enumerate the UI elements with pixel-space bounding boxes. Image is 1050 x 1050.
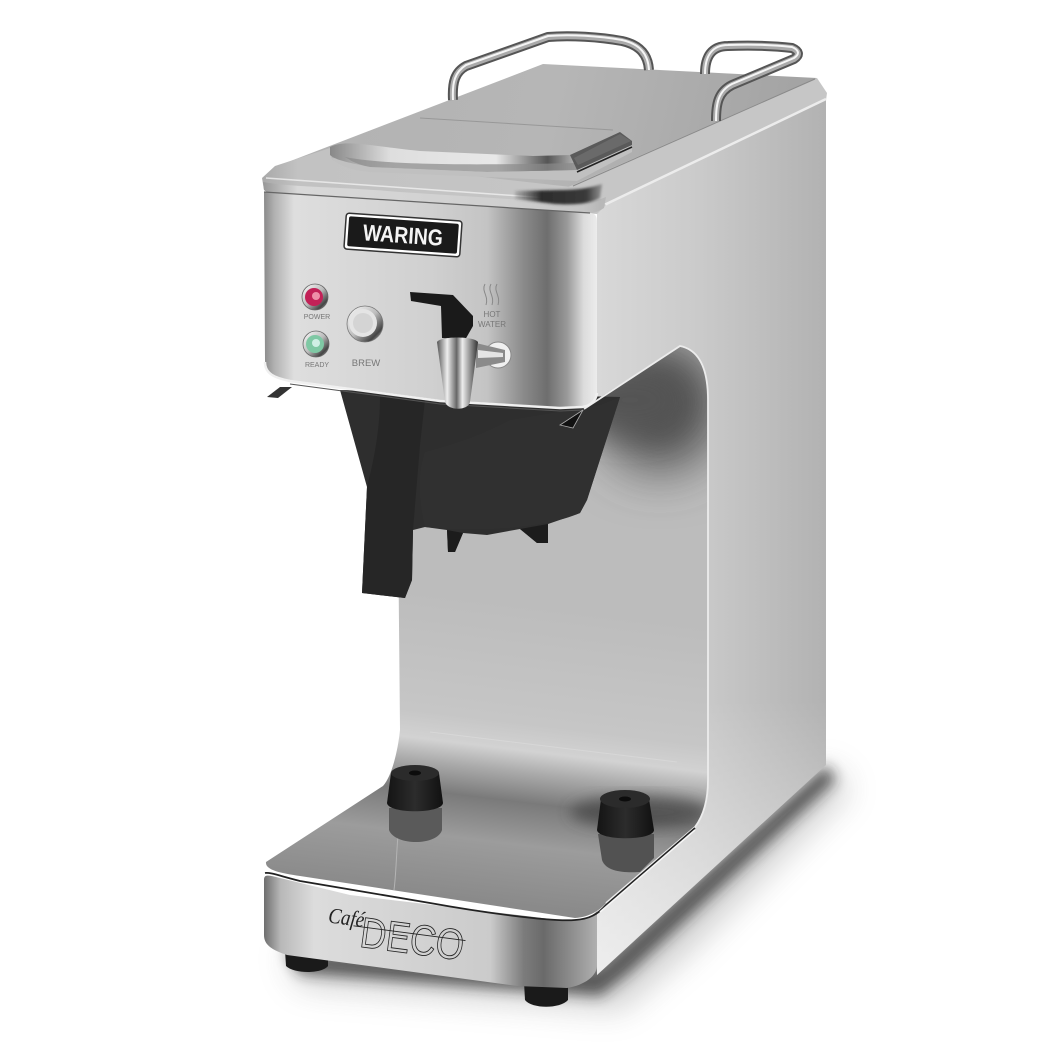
ready indicator <box>303 331 329 369</box>
lid <box>330 118 632 181</box>
body side panel <box>597 100 826 975</box>
interior back wall and drip tray plate <box>260 340 720 930</box>
icon and label: hot water <box>478 284 506 329</box>
logo: Café DECO: Café <box>327 903 367 932</box>
left bumper <box>387 765 443 842</box>
icon and label: hot water: HOT <box>484 310 501 319</box>
product illustration: coffee brewer <box>262 31 854 1022</box>
black funnel / brew basket <box>340 390 620 598</box>
rear carry handle <box>453 35 649 100</box>
ready indicator: READY <box>305 362 329 369</box>
power indicator <box>302 284 330 321</box>
floor shadow <box>285 765 850 1010</box>
power indicator: POWER <box>304 314 330 321</box>
left carafe clip <box>267 387 292 398</box>
base front panel <box>264 876 597 988</box>
logo badge: WARING: WARING <box>362 219 444 251</box>
top lip <box>262 78 827 214</box>
logo: Café DECO: DECO <box>357 909 467 970</box>
brew button: BREW <box>352 358 380 369</box>
right carafe clip <box>560 410 583 428</box>
logo: Café DECO <box>324 903 468 970</box>
hot water faucet <box>410 292 511 409</box>
logo badge: WARING <box>344 213 462 257</box>
brew-head front panel <box>264 192 597 407</box>
brew button <box>347 306 383 369</box>
right carry handle <box>705 45 798 121</box>
body top surface <box>275 64 817 190</box>
icon and label: hot water: WATER <box>478 320 506 329</box>
base plate dark edge <box>265 828 695 920</box>
right bumper <box>597 790 654 872</box>
base feet <box>285 950 568 1007</box>
column inner edge highlight <box>584 346 708 903</box>
